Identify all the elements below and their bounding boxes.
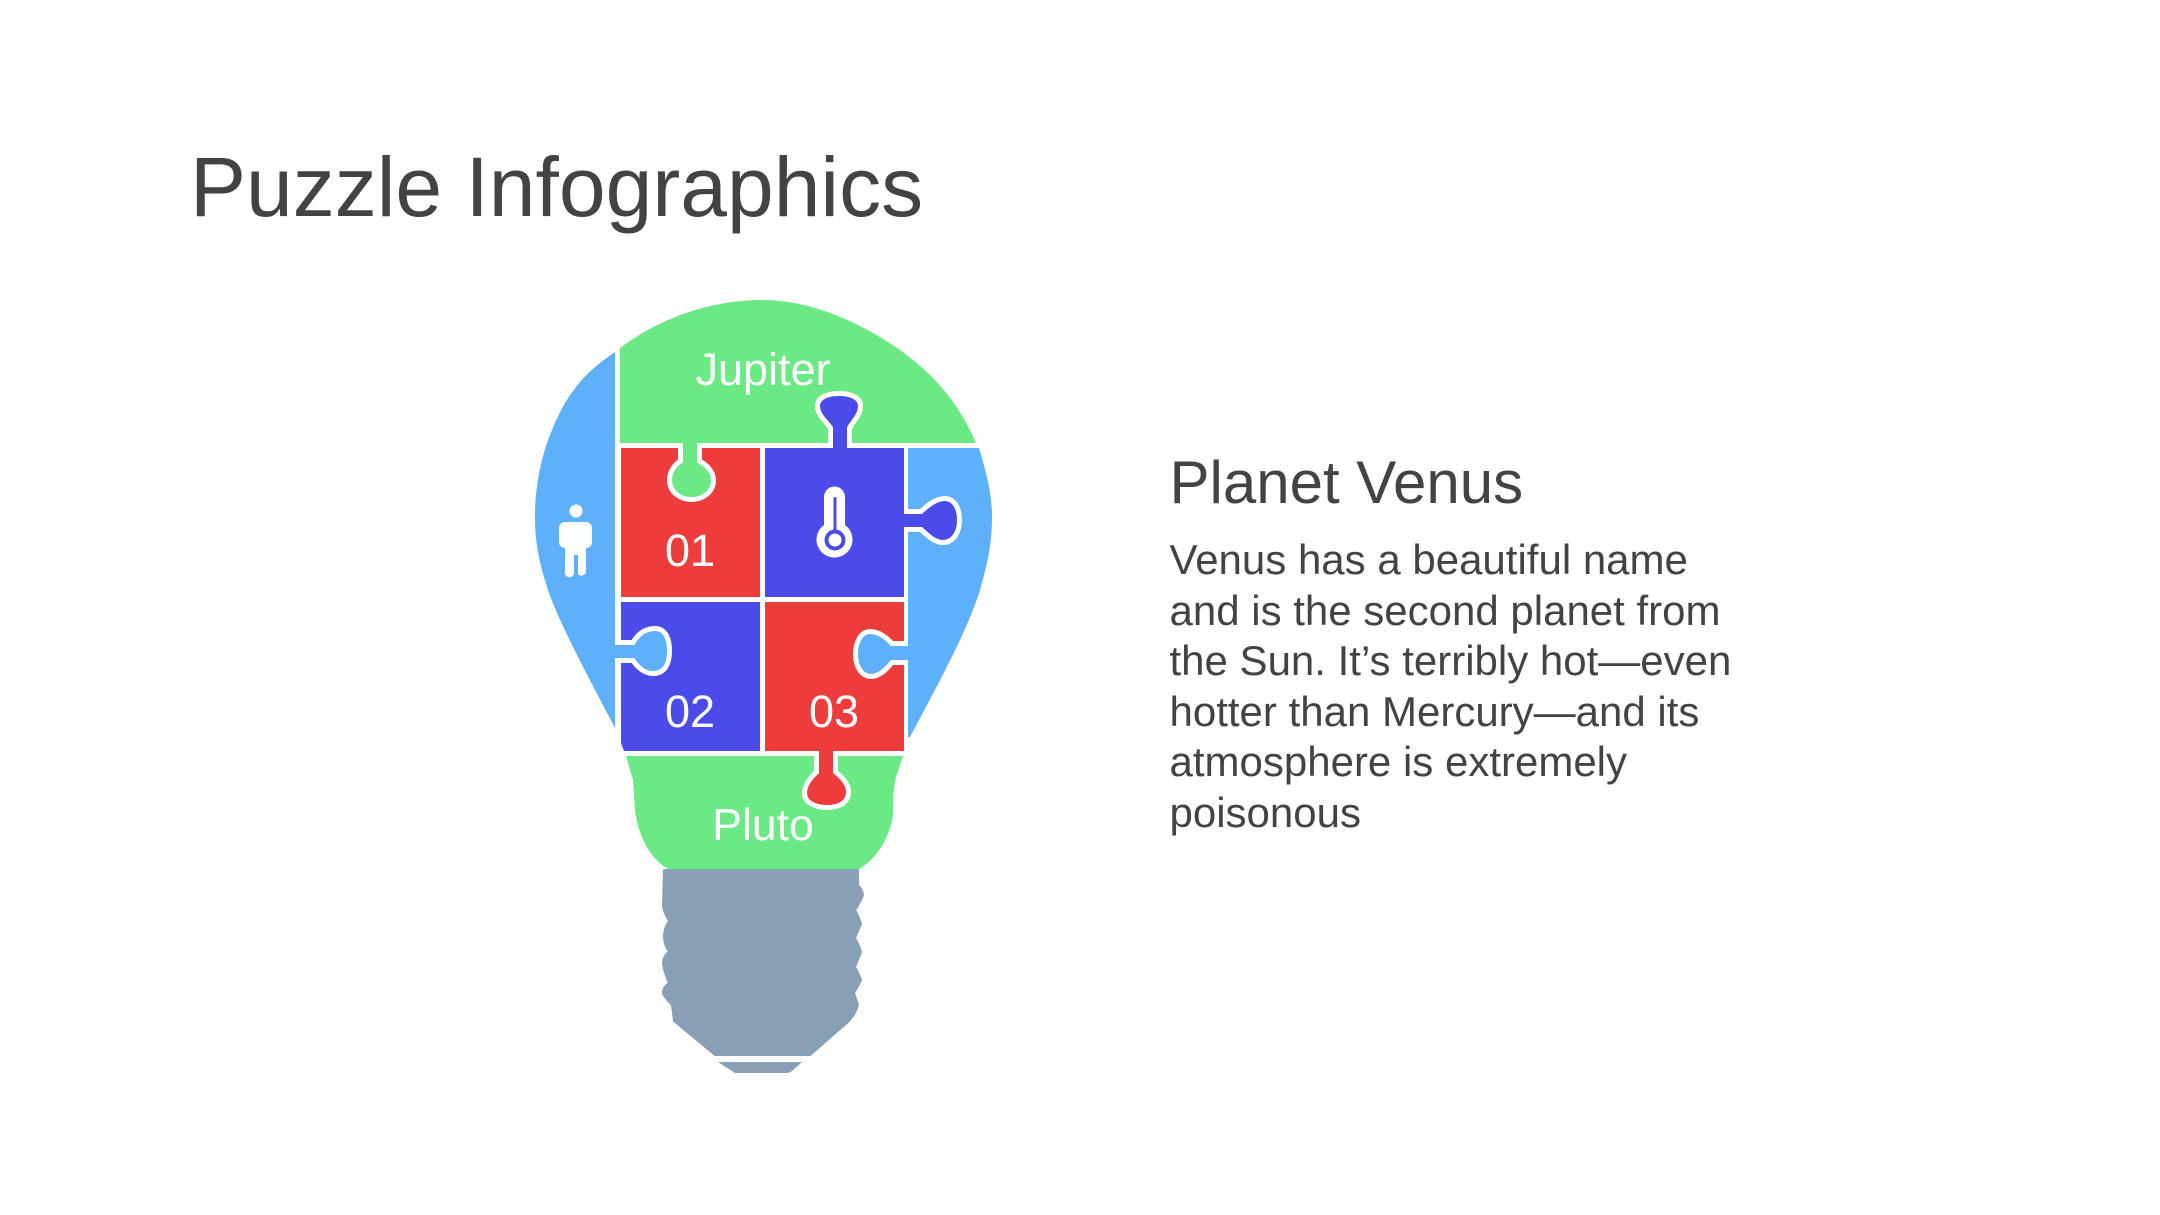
text block: description: hotter than Mercury—and its (1170, 688, 1699, 734)
panel: tile 03 (765, 602, 904, 751)
icon: person (559, 504, 592, 577)
puzzle tab: red 03 into Pluto (804, 748, 848, 808)
label: 02: 02 (665, 686, 715, 737)
label: 01: 01 (665, 525, 715, 576)
text block: description: atmosphere is extremely (1170, 738, 1627, 785)
text block: description: the Sun. It’s terribly hot—even (1170, 637, 1731, 684)
text block: description: and is the second planet from (1170, 586, 1721, 634)
panel: tile 02 (621, 602, 760, 751)
panel: right blue side piece (908, 448, 992, 737)
heading: Planet Venus: Planet Venus (1170, 449, 1523, 516)
base contact (718, 1062, 802, 1073)
panel: tile 01 (621, 448, 760, 597)
label: Pluto: Pluto (712, 801, 814, 850)
label: 03: 03 (809, 686, 859, 737)
panel: Pluto green bottom piece (626, 756, 903, 870)
puzzle tab: Jupiter into 01 (670, 442, 714, 500)
puzzle tab: indigo into Jupiter (818, 394, 860, 450)
label: Jupiter: Jupiter (695, 344, 831, 395)
icon: thermometer (816, 487, 853, 558)
text block: description: Venus has a beautiful name (1170, 536, 1688, 583)
panel: Jupiter green top piece (620, 300, 976, 443)
panel: grey bulb base (663, 870, 863, 1073)
puzzle tab: blue into 02 (612, 628, 670, 674)
panel: left blue side piece (535, 352, 615, 728)
puzzle tab: blue into 03 (856, 632, 912, 676)
text block: description: poisonous (1170, 788, 1361, 836)
panel: centre indigo tile (765, 448, 904, 597)
puzzle tab: indigo into right blue piece (900, 498, 960, 542)
title: Puzzle Infographics (190, 140, 923, 234)
text block: description (1170, 536, 1731, 836)
